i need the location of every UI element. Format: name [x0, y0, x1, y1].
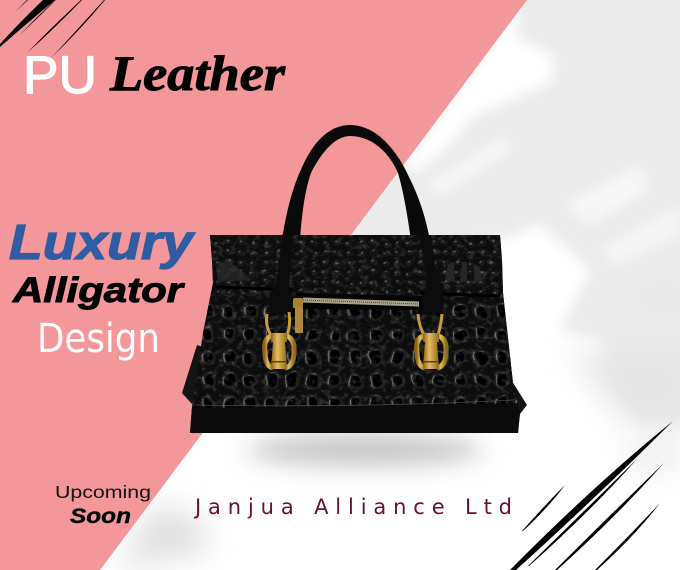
handbag	[180, 125, 530, 435]
text block: Luxury Alligator Design	[9, 216, 196, 362]
text block: Luxury Alligator Design: Design	[37, 316, 160, 362]
grey wall shadow	[330, 0, 680, 425]
pink diagonal panel	[0, 0, 527, 570]
lower grey patches	[120, 260, 680, 570]
bag bottom panel	[185, 403, 525, 435]
zipper	[296, 293, 422, 310]
title: PU Leather: PU	[23, 46, 97, 105]
zip pull	[293, 298, 303, 333]
leather texture	[190, 235, 518, 405]
text: Upcoming Soon: Soon	[70, 504, 131, 528]
bag flap	[205, 232, 505, 294]
front handle straps	[268, 235, 444, 315]
flap left highlight	[216, 262, 252, 282]
right buckle	[417, 314, 446, 369]
flap edge	[216, 287, 500, 296]
croc scales	[180, 290, 530, 408]
left buckle	[265, 312, 294, 369]
text: Upcoming Soon: Upcoming	[55, 482, 151, 502]
text: company name: Janjua Alliance Ltd	[193, 495, 512, 519]
bag side wings	[182, 345, 527, 414]
title: PU Leather: Leather	[109, 45, 286, 101]
top-left brush strokes	[0, 0, 105, 57]
bag handle	[280, 125, 430, 240]
text block: Luxury Alligator Design: Luxury	[9, 216, 196, 270]
flap right highlight	[445, 262, 482, 282]
white streaks	[400, 0, 680, 265]
text: Upcoming Soon	[55, 482, 151, 528]
bottom-right brush strokes	[510, 421, 673, 570]
text block: Luxury Alligator Design: Alligator	[12, 271, 186, 310]
bag shadow	[247, 434, 483, 466]
title: PU Leather	[23, 45, 286, 105]
bag body	[180, 230, 530, 435]
